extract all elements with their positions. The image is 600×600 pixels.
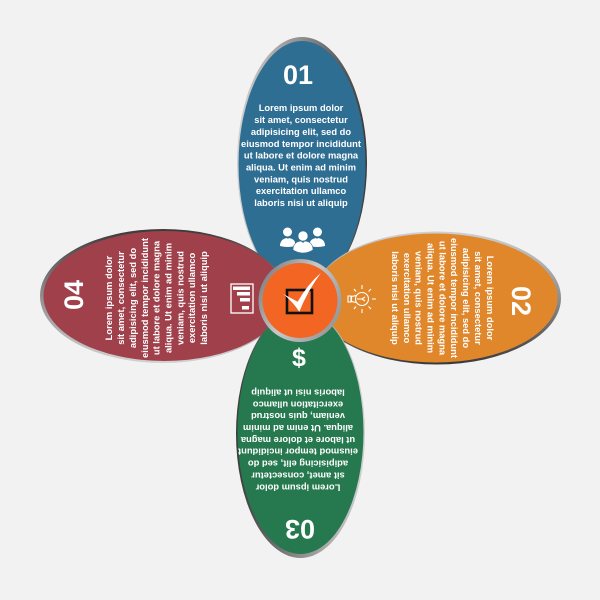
panel: 04 red petal — [40, 229, 286, 363]
green petal shape — [236, 309, 365, 558]
text block 04: Lorem ipsum dolor — [104, 255, 114, 340]
text block 04: sit amet, consectetur — [116, 251, 126, 345]
text block 04: laboris nisi ut aliquip — [199, 251, 209, 345]
text block 01: laboris nisi ut aliquip — [254, 198, 348, 208]
text block 01: Lorem ipsum dolor — [259, 103, 344, 113]
text block 01: exercitation ullamco — [256, 186, 346, 196]
number 02: 02 — [506, 286, 536, 316]
text block 04: ut labore et dolore magna — [152, 240, 162, 355]
blue petal shape — [237, 37, 367, 289]
text block 02: Lorem ipsum dolor — [485, 256, 495, 341]
text block 04: exercitation ullamco — [187, 253, 197, 343]
text block 03: veniam, quis nostrud — [251, 411, 345, 421]
icon: check mark — [283, 273, 321, 312]
text block 01: veniam, quis nostrud — [254, 174, 348, 184]
text block 04: aliqua. Ut enim ad minim — [164, 243, 174, 353]
icon: light bulb — [348, 285, 376, 313]
text block 02: sit amet, consectetur — [473, 251, 483, 345]
text block 02: eiusmod tempor incididunt — [449, 238, 459, 358]
text block 03: Lorem ipsum dolor — [255, 482, 340, 492]
text block 03 — [238, 388, 358, 492]
text block 03: aliqua. Ut enim ad minim — [243, 423, 353, 433]
text block 01: ut labore et dolore magna — [244, 150, 359, 160]
text block 03: laboris nisi ut aliquip — [251, 388, 345, 398]
text block 01: adipisicing elit, sed do — [251, 127, 351, 137]
hub fill — [262, 263, 338, 338]
number 04: 04 — [59, 280, 89, 310]
text block 03: ut labore et dolore magna — [240, 435, 355, 445]
text block 01: eiusmod tempor incididunt — [241, 139, 361, 149]
panel: 01 blue petal — [237, 37, 367, 289]
text block 02: ut labore et dolore magna — [438, 241, 448, 356]
text block 02: aliqua. Ut enim ad minim — [426, 243, 436, 353]
orange petal shape — [313, 232, 561, 364]
text block 02: exercitation ullamco — [402, 253, 412, 343]
text block 04: veniam, quis nostrud — [176, 251, 186, 345]
text block 01: sit amet, consectetur — [254, 115, 348, 125]
red petal shape — [40, 229, 286, 363]
text block 03: sit amet, consectetur — [251, 470, 345, 480]
hub: centre circle — [258, 259, 342, 342]
text block 01: aliqua. Ut enim ad minim — [246, 162, 356, 172]
text block 03: exercitation ullamco — [253, 400, 343, 410]
icon: chart document — [231, 284, 253, 313]
text block 04: adipisicing elit, sed do — [128, 248, 138, 348]
text block 02: laboris nisi ut aliquip — [390, 251, 400, 345]
icon: dollar sign: $ — [292, 344, 306, 372]
panel: 03 green petal — [236, 309, 365, 558]
panel: 02 orange petal — [313, 232, 561, 364]
text block 04 — [104, 238, 209, 358]
text block 03: eiusmod tempor incididunt — [238, 446, 358, 456]
icon: people — [280, 228, 325, 253]
number 01: 01 — [283, 60, 313, 90]
text block 02 — [390, 238, 495, 358]
number 03: 03 — [285, 514, 315, 544]
text block 04: eiusmod tempor incididunt — [140, 238, 150, 358]
text block 03: adipisicing elit, sed do — [248, 458, 348, 468]
text block 02: veniam, quis nostrud — [414, 251, 424, 345]
hub ring — [258, 259, 342, 342]
icon: checkbox — [287, 290, 312, 313]
text block 02: adipisicing elit, sed do — [461, 248, 471, 348]
